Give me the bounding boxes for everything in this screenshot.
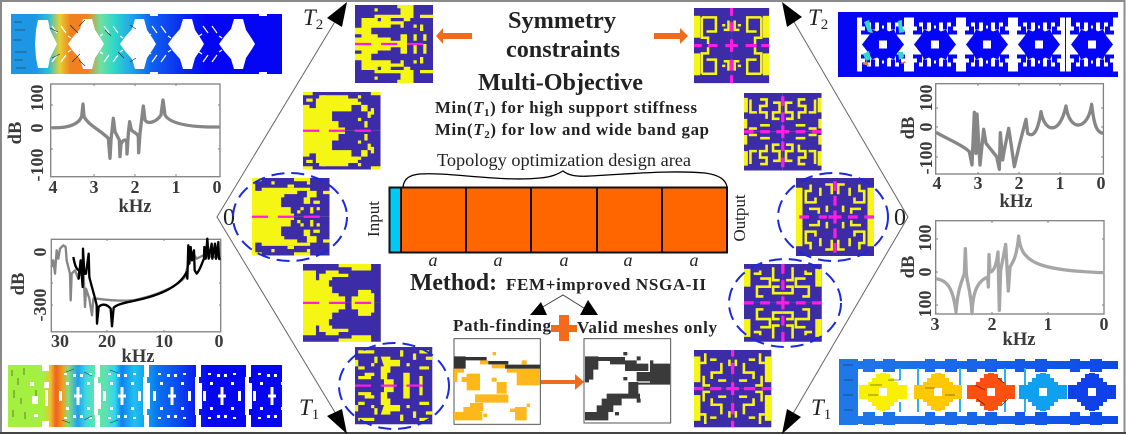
axis label T1 right: 1 [824,407,831,423]
arrow: path to mesh [541,374,584,390]
chart: mid left transmission comparison: 0 [30,248,50,256]
chart: lower right transmission: 100 [915,290,935,318]
objective 1: Min(T [435,98,483,117]
cell length labels: a [624,250,632,270]
dashed pareto ellipse right [778,173,888,261]
chart: top right transmission: 4 [932,173,942,193]
chart: lower right transmission: 1 [1044,314,1052,334]
chart: lower right transmission: 0 [1100,314,1108,334]
dashed pareto ellipse lower right [729,259,841,347]
cell length labels [428,250,698,270]
chart: lower right transmission: 3 [930,314,940,334]
objective 2: 2 [484,129,490,141]
chart: top right transmission: 2 [1014,173,1024,193]
design domain bar [390,188,727,252]
chart: top right transmission [899,84,1106,212]
FEM strip: bottom right [839,359,1118,425]
plus sign [551,315,577,341]
chart: top left transmission: kHz [119,197,151,217]
chart: lower right transmission: 100 [915,224,935,252]
origin label left: 0 [223,205,235,231]
chart: mid left transmission comparison: 20 [98,331,116,351]
topology unit cell: upper left outer [355,5,433,83]
input label: Input [364,201,383,237]
topology unit cell: lower left inner [303,264,381,342]
topology unit cell: lower left outer [355,347,432,424]
topology unit cell: lower right outer [694,350,771,427]
dashed pareto ellipse lower left [339,343,449,429]
valid mesh panel [584,339,671,423]
chart: top left transmission: 1 [172,177,180,197]
objective 1: 1 [484,107,489,119]
chart: top left transmission: 4 [48,177,58,197]
chart: mid left transmission comparison: kHz [122,347,154,367]
output label: Output [730,194,749,242]
chart: mid left transmission comparison: 30 [51,331,69,351]
chart: mid left transmission comparison: 0 [214,331,224,351]
cell length labels: a [690,250,698,270]
axis label T2 left: 2 [316,17,323,33]
chart: top left transmission: dB [6,122,26,144]
topology unit cell: right origin [796,178,874,256]
label: path-finding: Path-finding [453,316,552,335]
chart: top right transmission: 100 [916,84,936,112]
method detail: FEM+improved NSGA-II [506,275,706,294]
heading: symmetry constraints: constraints [506,37,620,63]
chart: top left transmission: -100 [27,148,47,182]
chart: lower right transmission: kHz [1003,330,1035,350]
topology unit cell: upper right outer [694,8,769,83]
chart: top right transmission: dB [899,117,919,139]
chart: mid left transmission comparison: dB [9,273,29,295]
chart: top left transmission [6,84,222,217]
chart: top right transmission: 0 [1096,173,1106,193]
chart: top left transmission: 0 [212,177,222,197]
method heading: Method: [410,270,497,296]
chart: mid left transmission comparison [9,239,224,367]
heading: multi-objective: Multi-Objective [478,70,643,96]
chart: top left transmission: 2 [130,177,140,197]
axis label T2 left: T [303,5,318,30]
chart: top right transmission: 3 [974,173,982,193]
topology unit cell: upper right inner [744,93,822,171]
right hexagon axes with arrows [782,2,908,434]
axis label T1 left: 1 [312,407,319,423]
bottom frame edge [0,432,1126,434]
design area label: Topology optimization design area [437,150,691,170]
heading: symmetry constraints [506,8,620,63]
FEM strip: top right [838,12,1118,77]
origin label right: 0 [894,205,906,231]
axis label T1 left: T [299,395,314,420]
topology unit cell: left origin [252,178,330,256]
chart: top right transmission: -100 [916,142,936,174]
heading: symmetry constraints: Symmetry [508,8,616,34]
brace [403,171,727,187]
axis label T1 right: T [811,395,826,420]
label: valid meshes only: Valid meshes only [577,318,718,337]
chart: top left transmission: 0 [27,124,47,132]
dashed pareto ellipse left [233,173,347,261]
objective 2: ) for low and wide band gap [490,120,709,139]
FEM strip: bottom left [8,365,291,427]
objective 1: ) for high support stiffness [490,98,697,117]
chart: mid left transmission comparison: -300 [30,288,50,322]
topology unit cell: upper left inner [303,92,381,170]
FEM strip: top left [11,14,282,74]
cell length labels: a [494,250,502,270]
arrow: symmetry to left [436,28,472,44]
topology unit cell: lower right inner [744,264,822,342]
cell length labels: a [428,250,438,270]
axis label T2 right: 2 [821,17,828,33]
chart: lower right transmission: dB [899,256,919,278]
axis label T2 right: T [808,5,823,30]
chart: mid left transmission comparison: 10 [155,331,173,351]
cell length labels: a [560,250,568,270]
chart: top left transmission: 100 [27,84,47,112]
chart: top right transmission: 0 [916,122,936,132]
chart: top right transmission: 1 [1056,173,1064,193]
chart: top right transmission: kHz [1000,192,1032,212]
branch arrows [530,295,598,315]
chart: lower right transmission: 0 [915,268,935,276]
left hexagon axes with arrows [217,2,347,434]
chart: top left transmission: 3 [90,177,98,197]
chart: lower right transmission: 2 [988,314,996,334]
arrow: symmetry to right [654,28,688,44]
path-finding mesh panel [454,339,540,424]
objective 2: Min(T [435,120,484,139]
chart: lower right transmission [899,221,1108,350]
